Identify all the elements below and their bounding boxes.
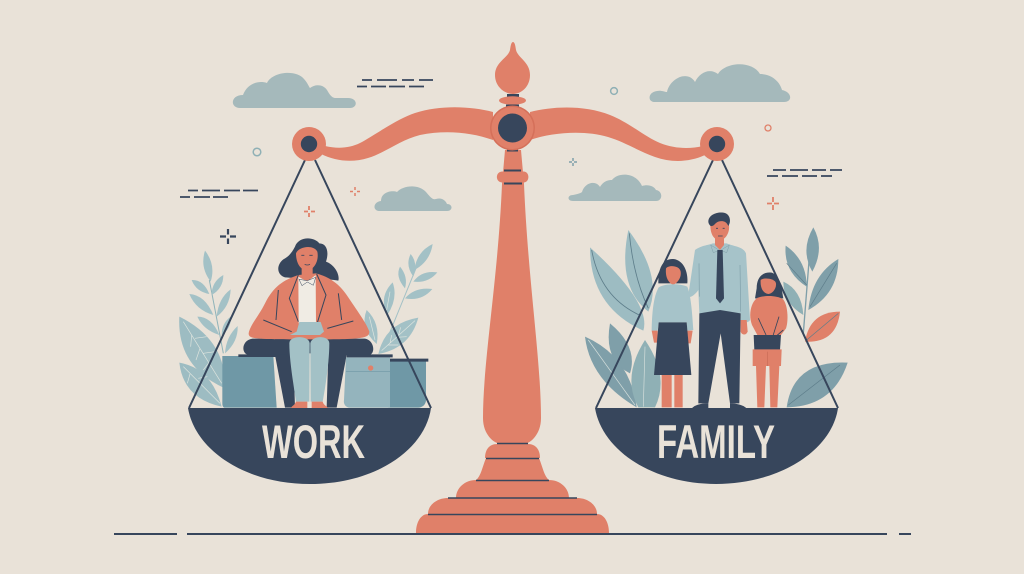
speed dashes: right (767, 170, 842, 176)
speed dashes: left (180, 190, 258, 197)
cloud: lower middle left (374, 186, 452, 211)
left case (222, 356, 277, 408)
balance beam (321, 107, 705, 161)
feet (291, 402, 328, 408)
man (687, 212, 750, 408)
base lines (428, 444, 597, 514)
speed dashes: top left (357, 80, 433, 86)
hair (278, 238, 339, 281)
stepped base (416, 444, 609, 533)
right pan strings (596, 160, 838, 408)
right pan bowl (595, 408, 838, 484)
left pan label: WORK (262, 415, 365, 468)
right foliage (585, 227, 848, 407)
left girl (652, 259, 693, 407)
left scale pan group: WORK (179, 160, 437, 484)
right pan label: FAMILY (657, 415, 775, 468)
neck and face (296, 247, 318, 277)
jacket (249, 273, 369, 339)
legs (289, 337, 329, 402)
family of three (652, 212, 788, 408)
cloud: upper right (650, 64, 790, 102)
ground line (114, 533, 911, 535)
right beam end (700, 127, 734, 161)
left pan strings (189, 160, 431, 408)
left beam end (292, 127, 326, 161)
column collar (497, 172, 528, 182)
blouse (298, 275, 316, 323)
cloud: upper left (233, 73, 356, 108)
cloud: lower middle right (568, 175, 661, 201)
decorative sparkles and circles (220, 88, 779, 244)
left foliage (179, 244, 437, 407)
scale stand (416, 150, 609, 533)
jacket lines (263, 274, 353, 332)
finial (495, 42, 530, 108)
dark lap (243, 339, 373, 408)
book (290, 322, 324, 335)
column (483, 150, 541, 444)
collar (299, 277, 316, 286)
right girl (750, 273, 788, 407)
right scale pan group: FAMILY (585, 160, 848, 484)
left pan bowl (188, 408, 431, 484)
facial features (301, 255, 313, 265)
woman seated with briefcases (222, 238, 428, 408)
far right case (388, 361, 426, 408)
near right case (344, 357, 390, 408)
hub pivot (490, 106, 535, 150)
collar lines (504, 150, 522, 184)
